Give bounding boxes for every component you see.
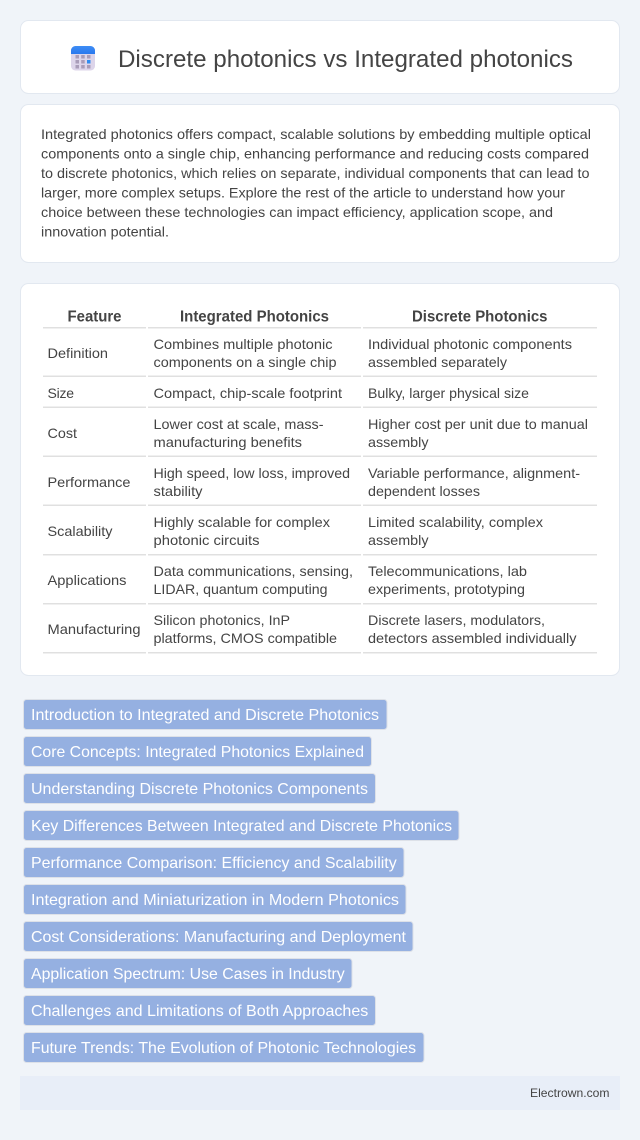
- tag: introduction: Introduction to Integrated and Discrete Photonics: [31, 707, 379, 724]
- row: cost: Lower cost at scale, mass-: [154, 416, 324, 432]
- tag: core concepts: Core Concepts: Integrated Photonics Explained: [31, 744, 364, 761]
- footer: [20, 1076, 620, 1110]
- row: performance: Performance: [48, 474, 131, 490]
- tag: challenges: Challenges and Limitations of Both Approaches: [31, 1003, 368, 1020]
- row: manufacturing: Manufacturing: [48, 621, 140, 637]
- row: scalability: [48, 514, 543, 548]
- row: manufacturing: [48, 612, 576, 646]
- row: applications: Telecommunications, lab: [368, 563, 527, 579]
- row: cost: Higher cost per unit due to manual: [368, 416, 588, 432]
- tag: application spectrum: [24, 958, 352, 988]
- row: manufacturing: detectors assembled individually: [368, 630, 576, 646]
- panel: comparison table: [20, 284, 620, 676]
- tag: core concepts: [24, 736, 372, 766]
- row: size: Bulky, larger physical size: [368, 385, 529, 401]
- tag: future trends: [24, 1032, 424, 1062]
- row: cost: assembly: [368, 434, 428, 450]
- row: cost: Cost: [48, 425, 77, 441]
- row: size: [48, 385, 529, 401]
- row: performance: High speed, low loss, improved: [154, 465, 350, 481]
- row: cost: [48, 416, 588, 450]
- intro text: innovation potential.: [41, 224, 169, 240]
- row: scalability: Scalability: [48, 523, 112, 539]
- panel: introduction: [20, 104, 620, 262]
- table header row: Integrated Photonics: [180, 308, 329, 326]
- tag: performance comparison: [24, 848, 404, 878]
- tag: cost considerations: Cost Considerations: Manufacturing and Deployment: [31, 929, 407, 946]
- row: scalability: assembly: [368, 532, 428, 548]
- row: size: Compact, chip-scale footprint: [154, 385, 342, 401]
- row: definition: assembled separately: [368, 354, 507, 370]
- row: scalability: Highly scalable for complex: [154, 514, 330, 530]
- row: cost: manufacturing benefits: [154, 434, 302, 450]
- tag: introduction: [24, 700, 387, 730]
- row: performance: Variable performance, alignment-: [368, 465, 580, 481]
- header panel: [20, 20, 620, 94]
- row: scalability: photonic circuits: [154, 532, 260, 548]
- row: applications: experiments, prototyping: [368, 581, 525, 597]
- title: Discrete photonics vs Integrated photonics: [118, 46, 573, 73]
- row: applications: LIDAR, quantum computing: [154, 581, 328, 597]
- row: definition: Definition: [48, 345, 108, 361]
- row: manufacturing: Silicon photonics, InP: [154, 612, 290, 628]
- tag: key differences: Key Differences Between Integrated and Discrete Photonics: [31, 818, 452, 835]
- row: performance: [48, 465, 580, 499]
- row: applications: [48, 563, 527, 597]
- row: manufacturing: Discrete lasers, modulators,: [368, 612, 545, 628]
- tag: integration and miniaturization: [24, 884, 406, 914]
- row: definition: components on a single chip: [154, 354, 337, 370]
- tag: discrete components: [24, 774, 376, 804]
- row: definition: Combines multiple photonic: [154, 336, 332, 352]
- row: performance: dependent losses: [368, 483, 480, 499]
- tag: application spectrum: Application Spectrum: Use Cases in Industry: [31, 966, 345, 983]
- intro text: Integrated photonics offers compact, scalable solutions by embedding multiple optical: [41, 126, 591, 142]
- table header row: Feature: [68, 308, 122, 326]
- tag: cost considerations: [24, 922, 413, 952]
- row: applications: Applications: [48, 572, 126, 588]
- row: definition: Individual photonic components: [368, 336, 572, 352]
- row: applications: Data communications, sensing,: [154, 563, 353, 579]
- intro text: choice between these technologies can impact efficiency, application scope, and: [41, 204, 553, 220]
- row: scalability: Limited scalability, complex: [368, 514, 543, 530]
- intro text: [41, 126, 591, 240]
- tag: integration and miniaturization: Integration and Miniaturization in Modern Photonics: [31, 892, 399, 909]
- tag: future trends: Future Trends: The Evolution of Photonic Technologies: [31, 1040, 416, 1057]
- tag: performance comparison: Performance Comparison: Efficiency and Scalability: [31, 855, 397, 872]
- table header row: [68, 308, 548, 326]
- intro text: larger, more complex setups. Explore the rest of the article to understand how your: [41, 184, 565, 200]
- tag: discrete components: Understanding Discrete Photonics Components: [31, 781, 368, 798]
- icon: calendar grid: [71, 46, 95, 70]
- table header row: Discrete Photonics: [412, 308, 548, 326]
- intro text: to discrete photonics, which relies on separate, individual components that can lead to: [41, 165, 590, 181]
- row: definition: [48, 336, 572, 370]
- row: size: Size: [48, 385, 74, 401]
- section tag list: [24, 700, 459, 1062]
- row: manufacturing: platforms, CMOS compatible: [154, 630, 337, 646]
- footer credit: Electrown.com: [530, 1086, 610, 1100]
- tag: key differences: [24, 810, 459, 840]
- intro text: components onto a single chip, enhancing performance and reducing costs compared: [41, 146, 589, 162]
- tag: challenges: [24, 996, 376, 1026]
- row: performance: stability: [154, 483, 202, 499]
